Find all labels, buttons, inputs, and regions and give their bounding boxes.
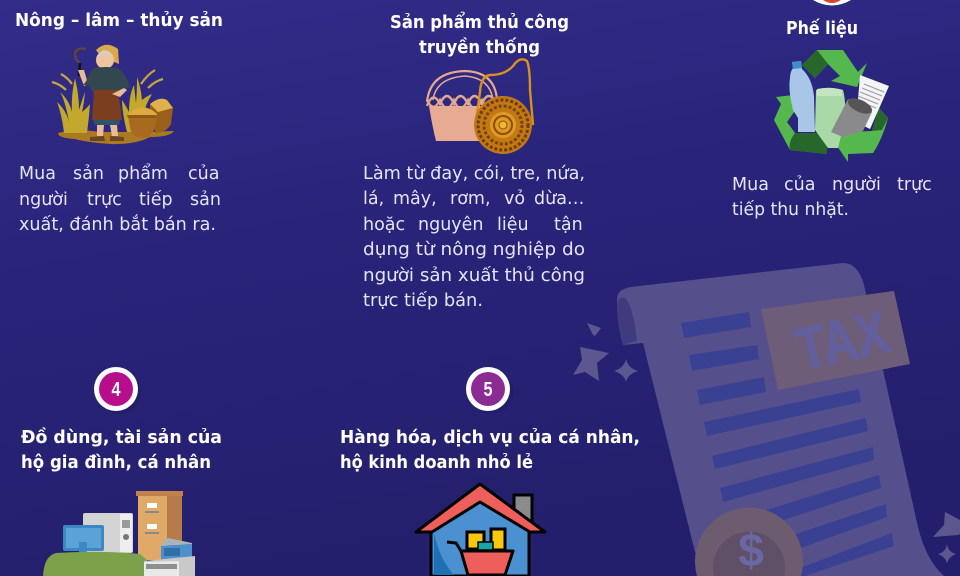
body text [19, 163, 221, 235]
body text: xuất, đánh bắt bán ra. [19, 214, 216, 235]
heading: Đồ dùng, tài sản của [21, 427, 222, 448]
heading: Hàng hóa, dịch vụ của cá nhân, [340, 428, 640, 448]
column 3: scrap [732, 0, 932, 220]
body text: Làm từ đay, cói, tre, nứa, [363, 164, 585, 184]
icon: house with shopping cart [416, 484, 545, 576]
body text: tiếp [139, 189, 173, 210]
body text: tận [554, 215, 583, 235]
column 2: handicrafts [363, 11, 585, 311]
body text: phẩm [118, 163, 168, 184]
body text: dụng từ nông nghiệp do [363, 240, 585, 260]
number badge 5 [466, 367, 513, 414]
body text: tiếp thu nhặt. [732, 199, 849, 220]
coin: $ [738, 524, 764, 576]
icon: household furniture and appliances [43, 491, 195, 576]
body text: Mua [732, 175, 769, 195]
heading: Phế liệu [786, 18, 858, 39]
body text: sản [190, 190, 221, 210]
paper roll [617, 263, 944, 576]
number badge 3 [813, 0, 851, 6]
body text: trực [897, 175, 932, 195]
column 2: handicrafts: truyền thống [419, 37, 540, 58]
body text: trực tiếp bán. [363, 290, 483, 311]
body text: nguyên [418, 215, 484, 235]
body text: rơm, [450, 189, 491, 209]
body text: của [188, 164, 219, 184]
column 1: agriculture [15, 11, 223, 235]
body text: Mua [19, 164, 56, 184]
number badge 4 [94, 367, 141, 414]
sparkle stars [573, 323, 960, 564]
icon: farmer with rice [52, 45, 174, 144]
body text: mây, [393, 189, 437, 209]
body text: của [784, 175, 815, 195]
icon: recycling with bottle, jar, can, paper [774, 50, 889, 162]
body text [732, 175, 932, 220]
stamp TAX: TAX [790, 298, 895, 384]
body text: trực [87, 190, 122, 210]
document lines [681, 312, 894, 576]
column 4: household goods: hộ gia đình, cá nhân [21, 453, 211, 473]
coin [695, 507, 803, 576]
background illustration: tax document [573, 263, 960, 576]
icon: basket and round bag [427, 59, 533, 154]
column 5: small business goods [340, 367, 640, 576]
column 4: household goods [21, 367, 222, 576]
number badge 5: 5 [484, 379, 492, 401]
body text: lá, [363, 189, 384, 209]
heading: Sản phẩm thủ công [390, 11, 569, 33]
column 5: small business goods: hộ kinh doanh nhỏ lẻ [340, 453, 533, 473]
body text: liệu [497, 215, 529, 235]
body text: người sản xuất thủ công [363, 265, 585, 286]
body text: dừa… [534, 189, 584, 209]
body text: người [832, 175, 881, 195]
body text: sản [73, 164, 104, 184]
body text [363, 164, 585, 311]
number badge 4: 4 [112, 379, 121, 401]
body text: người [19, 190, 68, 210]
body text: hoặc [363, 215, 405, 235]
heading: Nông – lâm – thủy sản [15, 11, 223, 31]
body text: vỏ [504, 189, 525, 209]
